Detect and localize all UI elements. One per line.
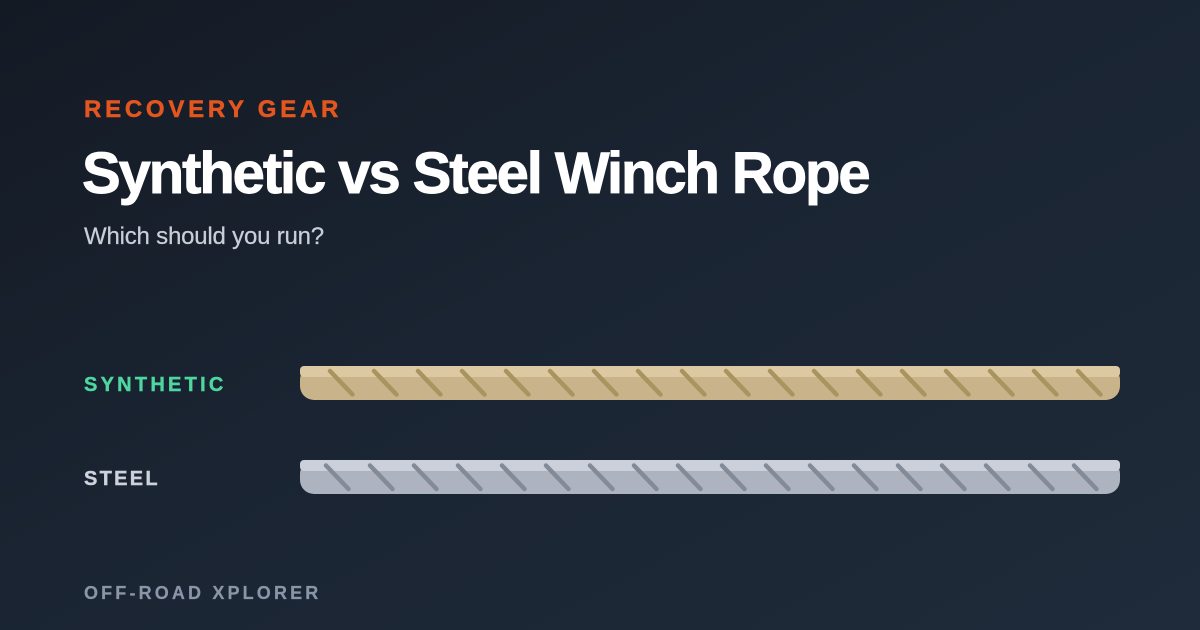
- rope: steel: [300, 460, 1120, 494]
- brand footer: OFF-ROAD XPLORER: [84, 583, 321, 603]
- title: Synthetic vs Steel Winch Rope: [82, 141, 869, 206]
- rope: synthetic: [300, 366, 1120, 400]
- label: synthetic: SYNTHETIC: [84, 374, 227, 396]
- label: steel: STEEL: [84, 468, 160, 490]
- subtitle: Which should you run?: [84, 223, 324, 250]
- kicker: recovery gear: RECOVERY GEAR: [84, 96, 342, 123]
